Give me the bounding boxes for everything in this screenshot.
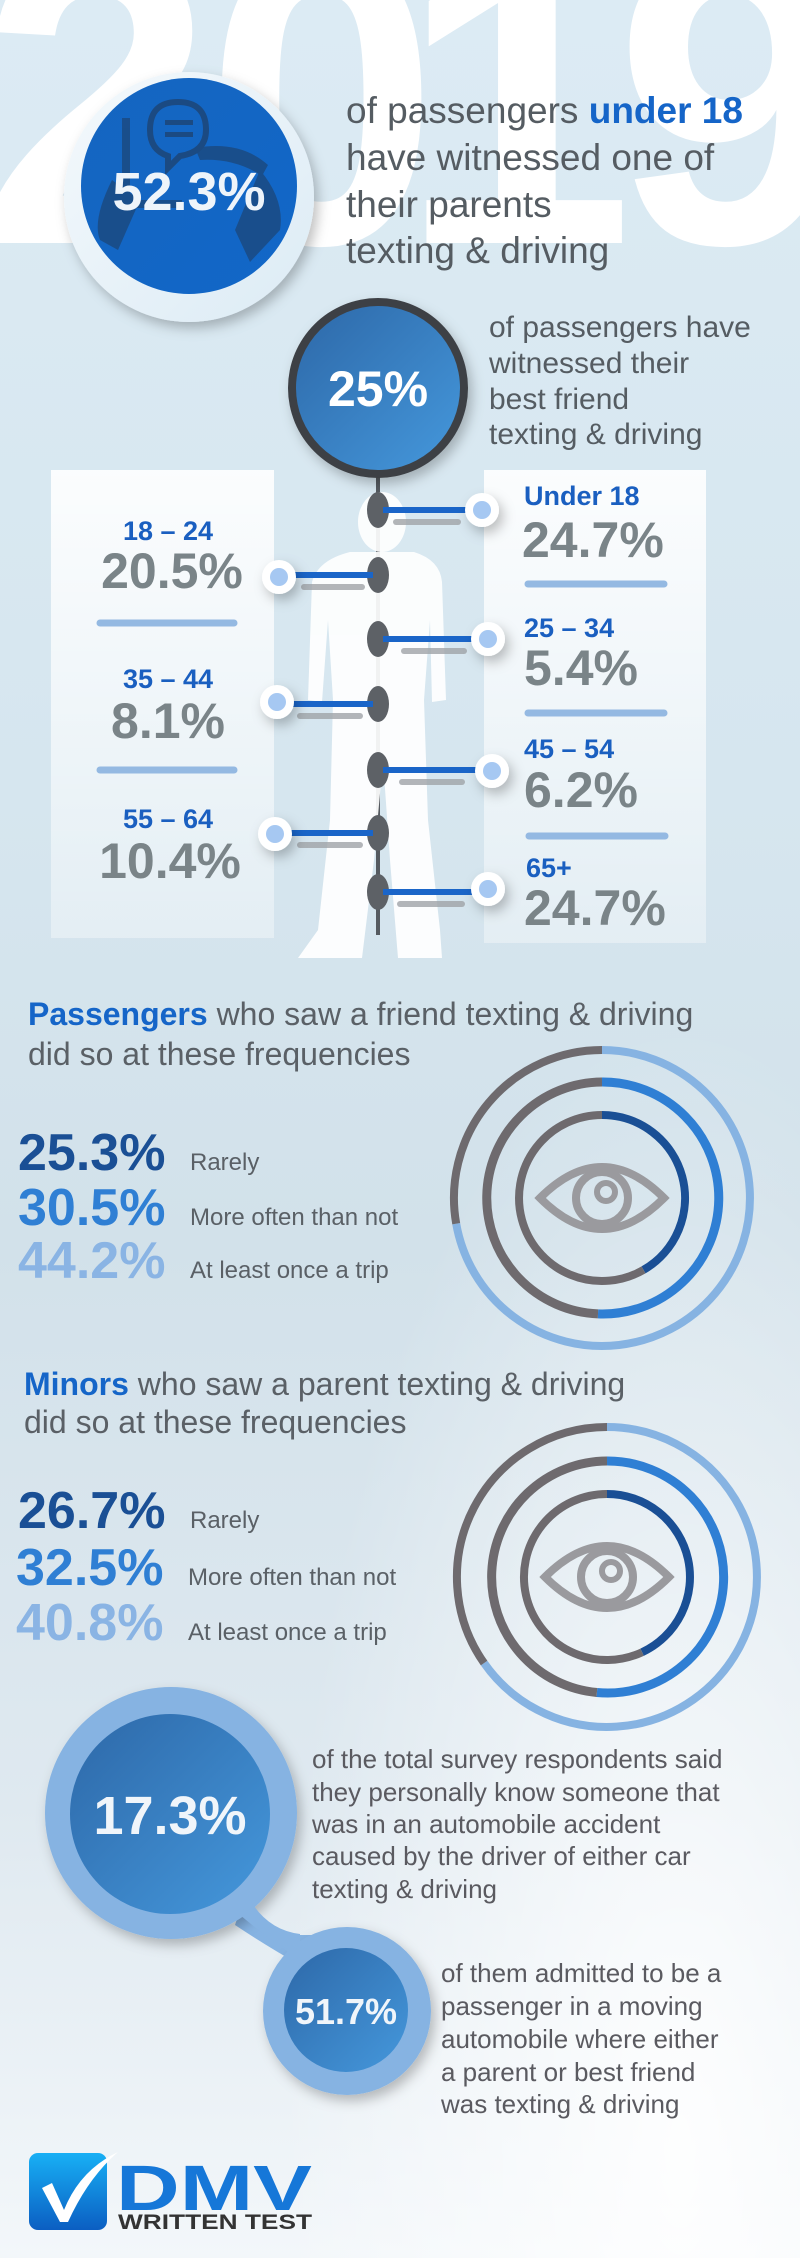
text: accident respondents: caused by the driver of either car xyxy=(312,1841,691,1871)
logo: DMV Written Test xyxy=(29,2152,312,2234)
heading: passengers frequencies xyxy=(28,996,693,1072)
text: best friend: best friend xyxy=(489,383,629,416)
text: accident respondents: they personally know someone that xyxy=(312,1777,720,1807)
text: accident respondents xyxy=(311,1744,722,1904)
text: passengers admitted xyxy=(440,1958,722,2119)
panel: left ages: 20.5% xyxy=(101,543,243,599)
text: best friend: witnessed their xyxy=(488,347,689,380)
text: best friend: texting & driving xyxy=(489,418,702,451)
bubbles: 17.3% and 51.7%: 51.7% xyxy=(295,1991,397,2032)
text: under 18 parents: have witnessed one of xyxy=(346,137,715,178)
bubbles: 17.3% and 51.7% xyxy=(45,1687,431,2095)
panel: right ages: 6.2% xyxy=(524,762,638,818)
text: under 18 parents: texting & driving xyxy=(346,230,609,271)
heading: minors frequencies: Minors who saw a parent texting & driving xyxy=(24,1366,625,1402)
background year 2019 xyxy=(0,0,800,333)
stats: minors frequencies xyxy=(16,1482,396,1652)
heading: minors frequencies: did so at these frequencies xyxy=(24,1404,406,1440)
stats: minors frequencies: 32.5% xyxy=(16,1539,163,1597)
text: under 18 parents: of passengers under 18 xyxy=(346,90,743,131)
panel: right ages: 45 – 54 xyxy=(524,734,614,764)
text: accident respondents: of the total survey respondents said xyxy=(312,1744,722,1774)
panel: right ages xyxy=(484,470,706,943)
text: best friend xyxy=(488,311,751,451)
panel: left ages: 35 – 44 xyxy=(123,664,213,694)
stats: passengers frequencies: 25.3% xyxy=(18,1124,165,1182)
spine line xyxy=(376,470,380,935)
heading: minors frequencies xyxy=(24,1366,625,1440)
stat circle: 25% xyxy=(288,298,468,478)
panel: left ages: 55 – 64 xyxy=(123,804,213,834)
panel: right ages: 24.7% xyxy=(524,880,666,936)
text: under 18 parents xyxy=(346,90,743,271)
panel: left ages: 8.1% xyxy=(111,693,225,749)
silhouette: person xyxy=(298,492,446,958)
text: under 18 parents: their parents xyxy=(346,184,552,225)
stats: minors frequencies: At least once a trip xyxy=(188,1619,387,1646)
stats: passengers frequencies: More often than not xyxy=(190,1204,398,1231)
stats: passengers frequencies xyxy=(18,1124,398,1290)
stats: passengers frequencies: Rarely xyxy=(190,1149,259,1176)
stats: minors frequencies: 26.7% xyxy=(18,1482,165,1540)
text: passengers admitted: was texting & driving xyxy=(440,2089,679,2119)
bubbles: 17.3% and 51.7%: 17.3% xyxy=(93,1786,247,1846)
text: best friend: of passengers have xyxy=(489,311,751,344)
text: accident respondents: was in an automobile accident xyxy=(311,1809,661,1839)
stats: passengers frequencies: At least once a trip xyxy=(190,1257,389,1284)
panel: right ages: 5.4% xyxy=(524,640,638,696)
text: passengers admitted: a parent or best friend xyxy=(441,2057,695,2087)
stats: passengers frequencies: 30.5% xyxy=(18,1179,165,1237)
text: passengers admitted: passenger in a moving xyxy=(441,1991,703,2021)
stats: passengers frequencies: 44.2% xyxy=(18,1232,165,1290)
icon: eye xyxy=(540,1167,664,1229)
stats: minors frequencies: More often than not xyxy=(188,1564,396,1591)
stat circle: 25%: 25% xyxy=(328,361,428,417)
stat circle: 52.3% xyxy=(64,72,314,322)
heading: passengers frequencies: Passengers who saw a friend texting & driving xyxy=(28,996,693,1032)
panel: right ages: 65+ xyxy=(526,853,572,883)
panel: right ages: 25 – 34 xyxy=(524,613,614,643)
panel: left ages xyxy=(51,470,274,938)
connectors: age nodes xyxy=(258,492,509,910)
stat circle: 52.3%: 52.3% xyxy=(112,162,266,222)
heading: passengers frequencies: did so at these frequencies xyxy=(28,1036,410,1072)
icon: hands, phone and chat bubble xyxy=(98,118,281,262)
ring chart: passengers xyxy=(454,1050,750,1346)
panel: right ages: Under 18 xyxy=(524,481,640,511)
text: passengers admitted: of them admitted to be a xyxy=(441,1958,722,1988)
logo: DMV Written Test: DMV xyxy=(116,2152,312,2224)
text: passengers admitted: automobile where either xyxy=(441,2024,719,2054)
stats: minors frequencies: 40.8% xyxy=(16,1594,163,1652)
logo: DMV Written Test: WRITTEN TEST xyxy=(118,2211,312,2234)
panel: left ages: 18 – 24 xyxy=(123,516,213,546)
panel: right ages: 24.7% xyxy=(522,512,664,568)
icon: eye xyxy=(545,1546,669,1608)
panel: left ages: 10.4% xyxy=(99,833,241,889)
ring chart: minors xyxy=(457,1427,757,1727)
text: accident respondents: texting & driving xyxy=(312,1874,497,1904)
stats: minors frequencies: Rarely xyxy=(190,1507,259,1534)
